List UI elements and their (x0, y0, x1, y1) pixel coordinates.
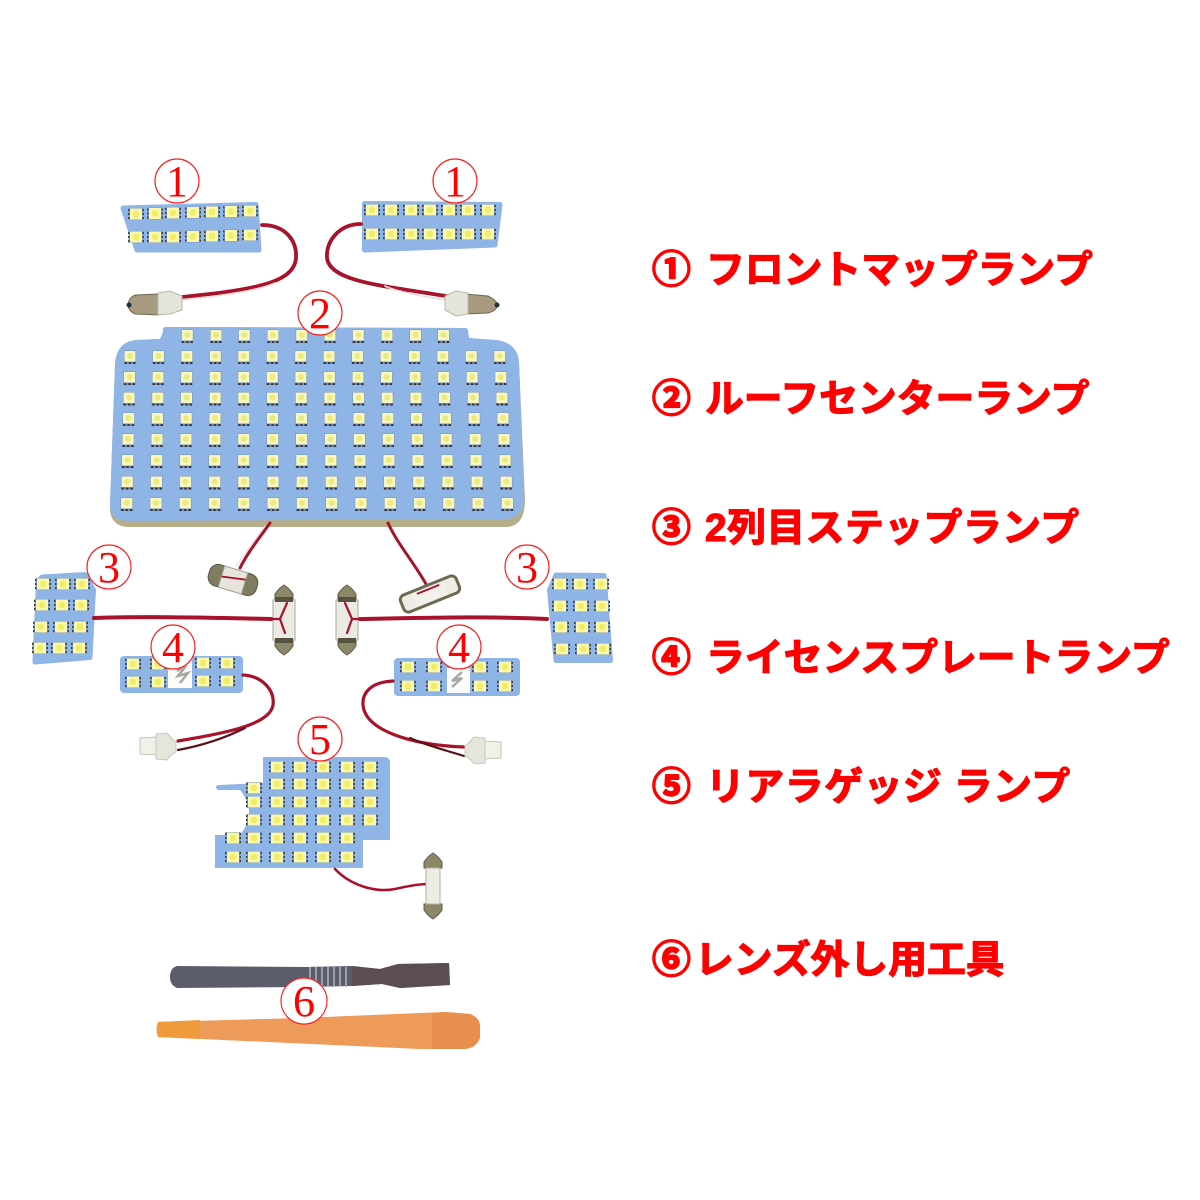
callout numbers on photo: 1 (444, 157, 466, 206)
label 3: ③ (652, 507, 691, 550)
panel: roof center lamp (110, 327, 525, 527)
panel: front map lamp left (123, 204, 296, 315)
bulb: step lamp right (336, 585, 360, 655)
label 4: ④ (652, 637, 691, 680)
label 3: 2列目ステップランプ (705, 507, 1080, 550)
panel: second row step lamp left (32, 574, 274, 662)
callout numbers on photo: 3 (516, 543, 538, 592)
panel: front map lamp right (327, 204, 500, 316)
label 6: ⑥ (652, 939, 691, 982)
tool: orange pry lever (156, 1012, 480, 1049)
panel: license plate lamp left (120, 656, 273, 760)
callout numbers on photo: 3 (98, 543, 120, 592)
panel: license plate lamp right (363, 658, 520, 764)
label 4: ライセンスプレートランプ (706, 637, 1170, 680)
label 1: ① (652, 249, 691, 292)
label 5: ⑤ (652, 766, 691, 809)
callout numbers on photo: 6 (293, 977, 315, 1026)
bulb: step lamp left (272, 585, 295, 655)
label 6: レンズ外し用工具 (695, 939, 1005, 982)
label 1: フロントマップランプ (706, 249, 1093, 292)
callout numbers on photo: 4 (448, 623, 470, 672)
callout numbers on photo: 4 (162, 623, 184, 672)
callout numbers on photo: 5 (309, 715, 331, 764)
wires and bulb: roof lamp left (206, 523, 270, 598)
label 5: リアラゲッジ ランプ (706, 766, 1071, 809)
panel: rear luggage lamp (215, 757, 442, 919)
callout numbers on photo (87, 157, 549, 1026)
wires and bulb: roof lamp right (388, 523, 461, 614)
label 2: ② (652, 378, 691, 421)
panel: second row step lamp right (360, 575, 611, 660)
label 2: ルーフセンターランプ (705, 378, 1090, 421)
callout numbers on photo: 2 (309, 289, 331, 338)
callout numbers on photo: 1 (166, 157, 188, 206)
tool: metal spatula (170, 963, 450, 988)
